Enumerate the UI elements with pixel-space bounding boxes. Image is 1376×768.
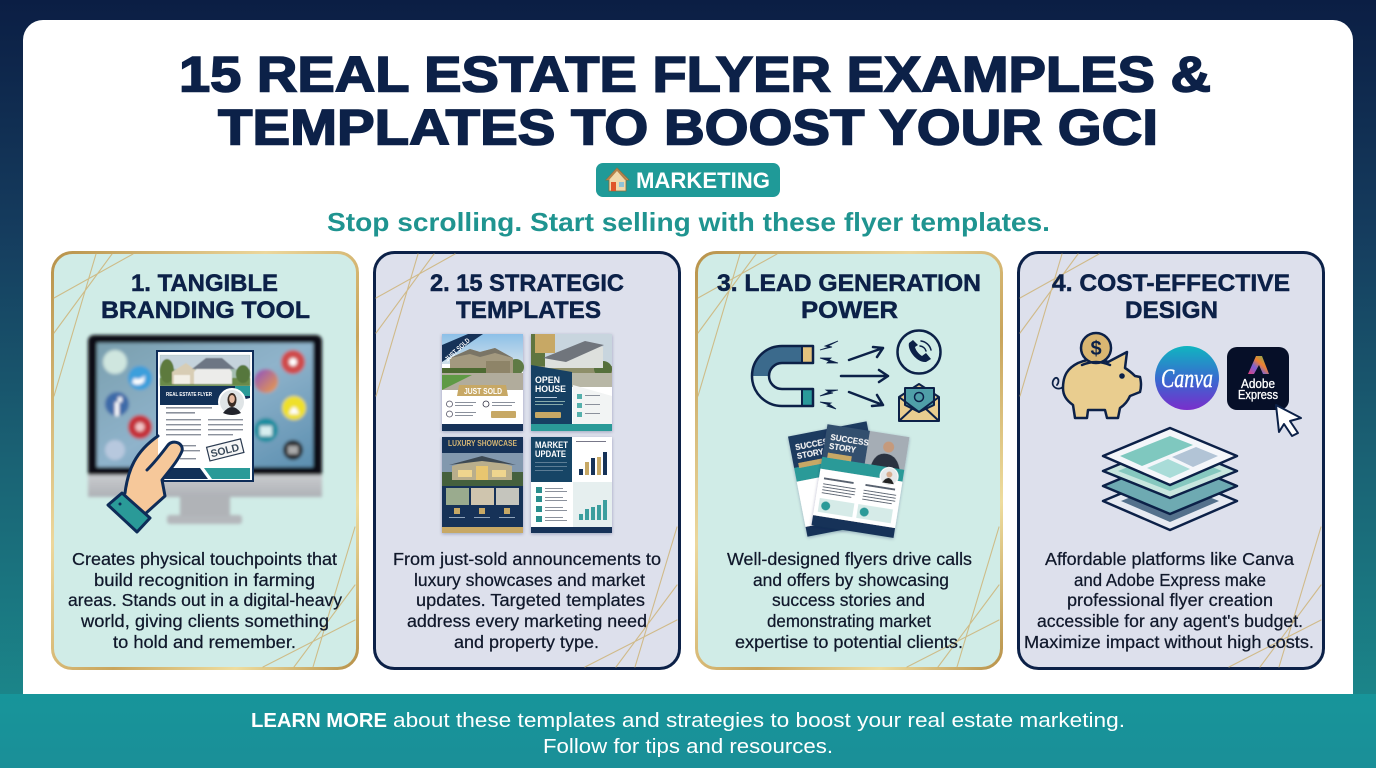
body text: card 2: From just-sold announcements to: [393, 549, 661, 569]
body text: card 3: [727, 549, 972, 652]
icon: piggy bank with coin: $: [1090, 338, 1102, 360]
heading: card 4: 4. COST-EFFECTIVE: [1052, 270, 1290, 297]
heading: card 2: 2. 15 STRATEGIC: [430, 270, 624, 297]
body text: card 2: address every marketing need: [407, 611, 647, 631]
icon: email envelope: [899, 384, 939, 421]
body text: card 1: world, giving clients something: [80, 611, 329, 631]
title: [179, 46, 1211, 156]
icon: hand holding flyer: [108, 436, 182, 532]
back flyer: [788, 421, 886, 537]
footer call to action: LEARN MORE: [251, 710, 387, 732]
heading: card 2: TEMPLATES: [456, 297, 601, 324]
flyer: market update: [531, 437, 612, 533]
arrows: leads to contact: [841, 347, 888, 406]
body text: card 1: areas. Stands out in a digital-heavy: [68, 590, 342, 610]
category badge: marketing: MARKETING: [636, 168, 770, 193]
back flyer: STORY: [796, 447, 825, 461]
heading: card 3: [717, 270, 981, 324]
panel: lead generation power: [696, 252, 1002, 668]
flyer: just sold: JUST SOLD: [444, 337, 472, 363]
icon: lightning sparks: [820, 341, 838, 409]
heading: card 4: DESIGN: [1125, 297, 1218, 324]
flyer stack: success story: [788, 421, 909, 538]
logo: Adobe Express: [1227, 347, 1289, 410]
body text: card 3: expertise to potential clients.: [735, 632, 963, 652]
body text: card 1: Creates physical touchpoints that: [72, 549, 337, 569]
icon: mouse cursor: [1276, 405, 1301, 436]
flyer: just sold: [442, 334, 524, 431]
footer call to action: Follow for tips and resources.: [543, 736, 833, 758]
heading: card 1: 1. TANGIBLE: [131, 270, 278, 297]
headshot: [219, 389, 245, 415]
flyer: just sold: JUST SOLD: [464, 387, 502, 396]
flyer: luxury showcase: LUXURY SHOWCASE: [448, 438, 517, 448]
front flyer: SUCCESS: [830, 433, 870, 448]
illustration: printed flyer: [157, 351, 253, 481]
flyer: market update: MARKET: [535, 440, 568, 450]
flyer: open house: [531, 334, 612, 431]
footer call to action: [251, 710, 1125, 758]
icon: house: [606, 168, 629, 191]
front flyer: [812, 424, 909, 538]
title: TEMPLATES TO BOOST YOUR GCI: [218, 98, 1158, 156]
body text: card 3: Well-designed flyers drive calls: [727, 549, 972, 569]
heading: card 1: [101, 270, 310, 324]
panel: cost-effective design: [1018, 252, 1324, 668]
body text: card 4: Affordable platforms like Canva: [1045, 549, 1294, 569]
flyer: open house: HOUSE: [535, 384, 566, 395]
flyer: luxury showcase: [442, 437, 523, 533]
logo: Canva: [1155, 346, 1219, 410]
body text: card 2: and property type.: [454, 632, 599, 652]
body text: card 3: and offers by showcasing: [753, 570, 949, 590]
panel: 15 strategic templates: [374, 252, 680, 668]
illustration: desktop monitor with social icons: [88, 335, 322, 524]
subtitle: Stop scrolling. Start selling with these flyer templates.: [327, 207, 1050, 237]
body text: card 2: updates. Targeted templates: [416, 590, 645, 610]
body text: card 2: [393, 549, 661, 652]
back flyer: SUCCESS: [794, 436, 835, 452]
heading: card 3: 3. LEAD GENERATION: [717, 270, 981, 297]
heading: card 2: [430, 270, 624, 324]
body text: card 4: accessible for any agent's budget.: [1037, 611, 1303, 631]
footer banner: [0, 694, 1376, 768]
footer call to action: about these templates and strategies to boost your real estate marketing.: [393, 710, 1125, 732]
front flyer: STORY: [828, 442, 857, 455]
body text: card 4: Maximize impact without high costs.: [1024, 632, 1314, 652]
body text: card 3: demonstrating market: [767, 611, 931, 631]
logo: Canva: Canva: [1161, 364, 1213, 393]
flyer: open house: OPEN: [535, 375, 560, 386]
icon: horseshoe magnet: [752, 346, 813, 406]
icon: piggy bank with coin: [1053, 333, 1141, 418]
category badge: marketing: [596, 163, 780, 197]
body text: card 1: [68, 549, 342, 652]
body text: card 4: [1024, 549, 1314, 652]
sold stamp: SOLD: [209, 442, 241, 460]
heading: card 4: [1052, 270, 1290, 324]
icon: phone call: [898, 330, 940, 374]
title: 15 REAL ESTATE FLYER EXAMPLES &: [179, 46, 1211, 102]
body text: card 3: success stories and: [772, 590, 925, 610]
panel: tangible branding tool: [52, 252, 358, 668]
icon: stacked design layers: [1103, 428, 1237, 530]
heading: card 3: POWER: [801, 297, 898, 324]
body text: card 1: build recognition in farming: [94, 570, 315, 590]
flyer: market update: UPDATE: [535, 449, 566, 459]
heading: card 1: BRANDING TOOL: [101, 297, 310, 324]
body text: card 1: to hold and remember.: [113, 632, 296, 652]
body text: card 4: professional flyer creation: [1067, 590, 1273, 610]
illustration: printed flyer: REAL ESTATE FLYER: [166, 392, 212, 398]
logo: Adobe Express: Express: [1238, 388, 1278, 402]
body text: card 2: luxury showcases and market: [414, 570, 645, 590]
logo: Adobe Express: Adobe: [1241, 377, 1275, 391]
body text: card 4: and Adobe Express make: [1074, 570, 1266, 590]
